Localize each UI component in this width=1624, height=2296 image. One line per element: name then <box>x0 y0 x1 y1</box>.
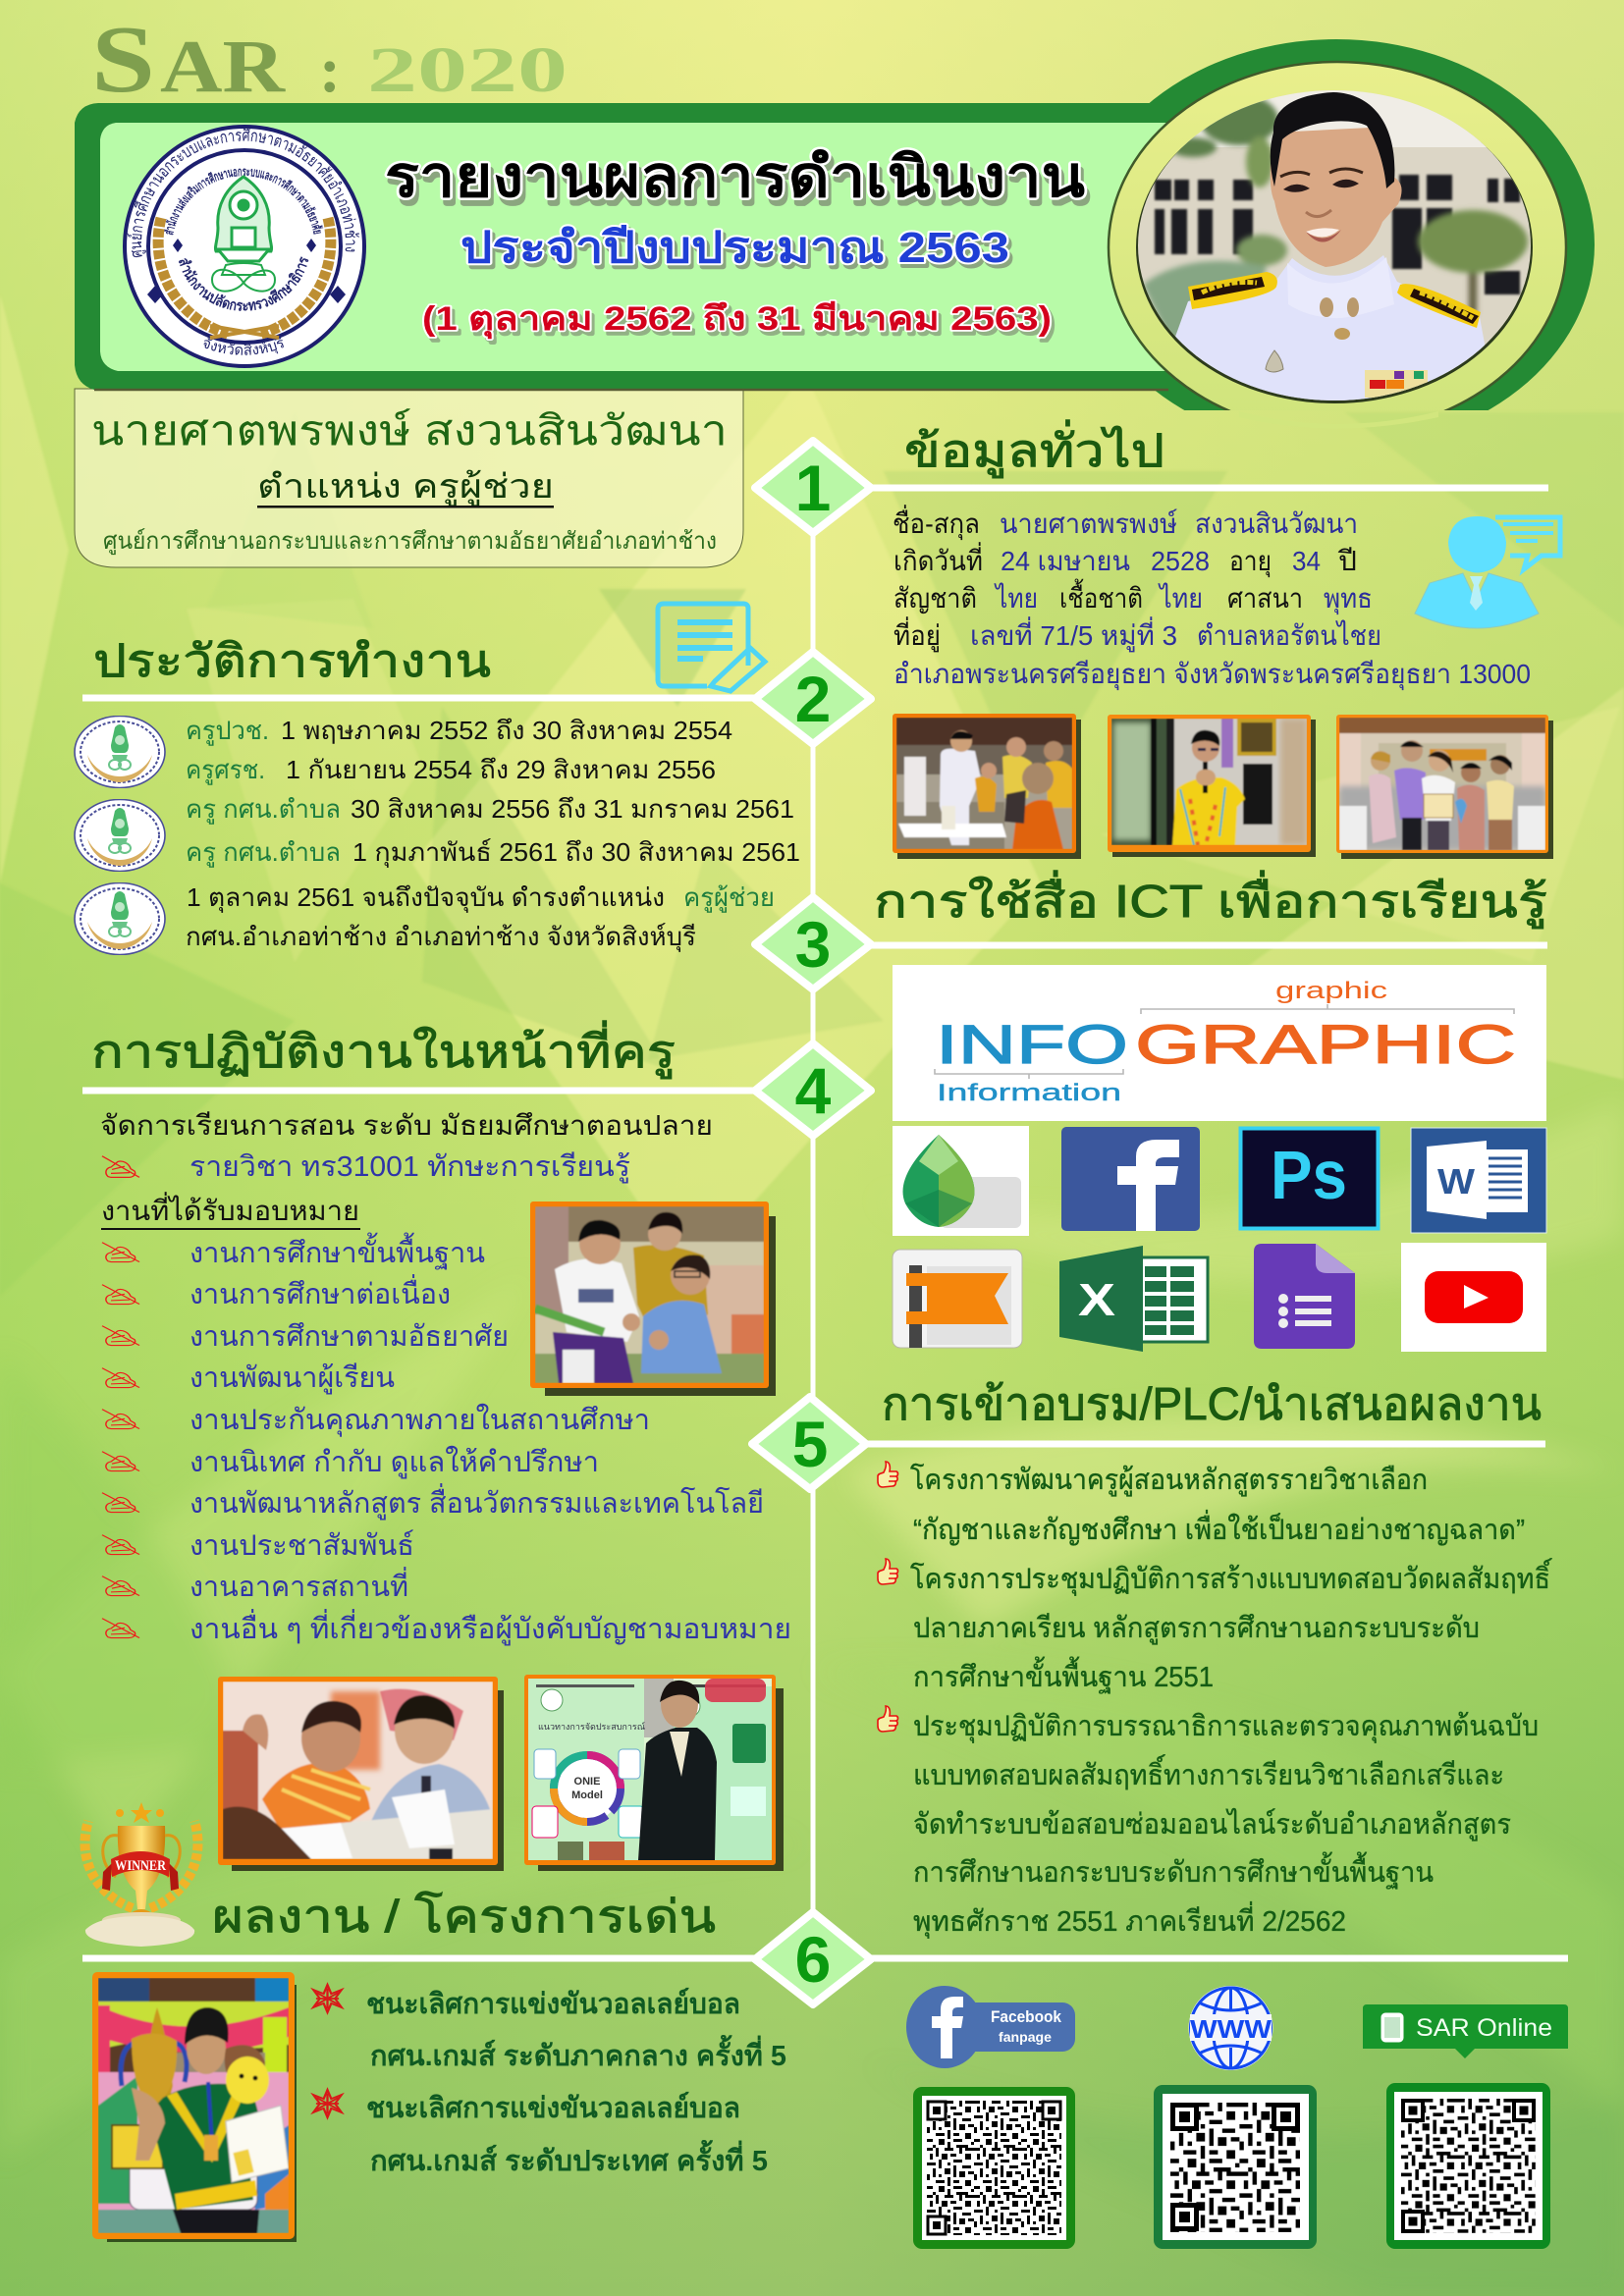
work history entries: 1 พฤษภาคม 2552 ถึง 30 สิงหาคม 2554 <box>281 716 732 745</box>
icon: winner trophy <box>85 1802 197 1947</box>
icon: word <box>1411 1128 1546 1233</box>
achievements text: ชนะเลิศการแข่งขันวอลเลย์บอล <box>366 1987 740 2020</box>
personal details: 34 <box>1292 546 1321 576</box>
photo: speaker with microphone <box>1108 715 1316 857</box>
work history entries: กศน.อำเภอท่าช้าง อำเภอท่าช้าง จังหวัดสิงห์บุรี <box>186 922 696 952</box>
assigned tasks: งานพัฒนาผู้เรียน <box>189 1362 395 1395</box>
logos: history <box>75 717 165 954</box>
photo: ONIE model poster: Model <box>571 1789 603 1801</box>
badge: facebook fanpage <box>906 1986 1075 2068</box>
training list: พุทธศักราช 2551 ภาคเรียนที่ 2/2562 <box>913 1901 1346 1939</box>
personal details: สงวนสินวัฒนา <box>1195 508 1358 539</box>
achievements text: กศน.เกมส์ ระดับประเทศ ครั้งที่ 5 <box>370 2139 768 2177</box>
badge: SAR online: SAR Online <box>1416 2014 1552 2042</box>
work history entries: ครูผู้ช่วย <box>683 882 775 913</box>
infographic wordmark: Information <box>937 1080 1121 1106</box>
photo: meeting <box>218 1677 504 1871</box>
work history entries: 30 สิงหาคม 2556 ถึง 31 มกราคม 2561 <box>351 794 794 824</box>
infographic wordmark: INFO <box>936 1013 1128 1075</box>
badge: SAR online <box>1363 2004 1568 2058</box>
training list: ประชุมปฏิบัติการบรรณาธิการและตรวจคุณภาพต้นฉบับ <box>913 1711 1539 1743</box>
badge: facebook fanpage: Facebook <box>991 2007 1061 2026</box>
training list: การศึกษาขั้นพื้นฐาน 2551 <box>913 1656 1214 1694</box>
work history entries: ครู กศน.ตำบล <box>186 794 341 825</box>
section 1: general info <box>755 419 1560 859</box>
organisation: ศูนย์การศึกษานอกระบบและการศึกษาตามอัธยาศัยอำเภอท่าช้าง <box>103 527 717 556</box>
timeline spine <box>811 481 815 1963</box>
logo <box>123 125 366 368</box>
personal details: เลขที่ 71/5 หมู่ที่ 3 <box>970 616 1177 653</box>
assigned tasks: งานการศึกษาต่อเนื่อง <box>189 1274 451 1310</box>
work history entries <box>186 716 800 952</box>
title: SAR 2020: AR <box>160 26 286 108</box>
QR code: SAR online <box>1386 2083 1550 2249</box>
personal details: เชื้อชาติ <box>1059 578 1143 614</box>
personal details: เกิดวันที่ <box>893 542 983 576</box>
assigned tasks: งานอื่น ๆ ที่เกี่ยวข้องหรือผู้บังคับบัญชามอบหมาย <box>189 1609 791 1646</box>
section 3: ICT <box>755 870 1547 1352</box>
subject: รายวิชา ทร31001 ทักษะการเรียนรู้ <box>189 1151 630 1184</box>
personal details: อำเภอพระนครศรีอยุธยา จังหวัดพระนครศรีอยุธยา 13000 <box>893 659 1531 691</box>
achievements text: กศน.เกมส์ ระดับภาคกลาง ครั้งที่ 5 <box>370 2034 786 2072</box>
heading: fiscal year: ประจำปีงบประมาณ 2563 <box>460 224 1009 272</box>
title: SAR 2020: S <box>91 7 155 112</box>
logo: จังหวัดสิงห์บุรี <box>204 336 284 355</box>
diamond 2: 2 <box>795 663 831 735</box>
training list: แบบทดสอบผลสัมฤทธิ์ทางการเรียนวิชาเลือกเสรีและ <box>913 1754 1504 1791</box>
personal details: ชื่อ-สกุล <box>893 505 980 541</box>
work history entries: 1 กันยายน 2554 ถึง 29 สิงหาคม 2556 <box>286 755 716 784</box>
training list: ปลายภาคเรียน หลักสูตรการศึกษานอกระบบระดับ <box>913 1613 1480 1645</box>
icon: youtube <box>1401 1243 1546 1352</box>
QR code: facebook <box>913 2087 1075 2249</box>
position: ตำแหน่ง ครูผู้ช่วย <box>257 468 554 507</box>
assigned tasks: งานการศึกษาตามอัธยาศัย <box>189 1321 509 1353</box>
diamond 1: 1 <box>795 452 831 524</box>
icon: flag <box>893 1250 1022 1348</box>
personal details: ไทย <box>1158 583 1203 614</box>
heading: general info: ข้อมูลทั่วไป <box>904 419 1164 478</box>
section 4: teacher duties <box>82 1020 871 1871</box>
photo: portrait <box>1129 88 1542 412</box>
section 2: work history <box>75 604 871 954</box>
icon: word: W <box>1437 1161 1475 1201</box>
work history entries: ครูปวช. <box>186 716 269 746</box>
infographic wordmark <box>893 965 1546 1121</box>
title: SAR 2020: 2020 <box>367 34 568 106</box>
heading: work history: ประวัติการทำงาน <box>93 635 491 686</box>
training list: โครงการพัฒนาครูผู้สอนหลักสูตรรายวิชาเลือก <box>910 1463 1428 1497</box>
icon: excel <box>1059 1246 1208 1352</box>
title: SAR 2020 <box>91 7 568 112</box>
icon: winner trophy: WINNER <box>115 1858 166 1874</box>
icon: facebook <box>1061 1127 1200 1231</box>
logo: ศูนย์การศึกษานอกระบบและการศึกษาตามอัธยาศัยอำเภอท่าช้าง <box>128 128 359 257</box>
diamond 4: 4 <box>795 1054 832 1127</box>
photo: ONIE model poster: ONIE <box>574 1776 600 1788</box>
personal details: ปี <box>1337 546 1357 576</box>
assigned tasks: งานการศึกษาขั้นพื้นฐาน <box>189 1232 485 1270</box>
assigned tasks: งานนิเทศ กำกับ ดูแลให้คำปรึกษา <box>189 1445 599 1479</box>
icon: snapseed <box>893 1126 1029 1236</box>
photo: winner with trophy <box>92 1972 297 2242</box>
work history entries: 1 ตุลาคม 2561 จนถึงปัจจุบัน ดำรงตำแหน่ง <box>187 882 665 913</box>
diamond 6: 6 <box>795 1923 831 1996</box>
heading: training: การเข้าอบรม/PLC/นำเสนอผลงาน <box>882 1378 1542 1429</box>
panel: name card <box>75 389 743 567</box>
diamond 5: 5 <box>792 1408 828 1480</box>
personal details <box>893 505 1531 691</box>
section 6: achievements <box>82 1802 1568 2249</box>
work history entries: ครูศรช. <box>186 755 265 785</box>
personal details: ตำบลหอรัตนไชย <box>1197 620 1381 651</box>
assigned tasks: งานอาคารสถานที่ <box>189 1567 408 1603</box>
personal details: ศาสนา <box>1227 583 1303 614</box>
personal details: พุทธ <box>1324 583 1373 615</box>
photo: ONIE model poster: แนวทางการจัดประสบการณ์ <box>538 1721 645 1732</box>
personal details: ที่อยู่ <box>893 616 941 653</box>
assigned tasks: งานประกันคุณภาพภายในสถานศึกษา <box>189 1403 650 1437</box>
personal details: ไทย <box>994 583 1038 614</box>
icon: photoshop: Ps <box>1271 1137 1347 1213</box>
icon: person with speech bubble <box>1415 516 1560 628</box>
heading: ICT: การใช้สื่อ ICT เพื่อการเรียนรู้ <box>874 870 1547 929</box>
QR code: website <box>1154 2085 1317 2249</box>
badge: facebook fanpage: fanpage <box>999 2029 1052 2045</box>
diamond 5 <box>752 1397 866 1489</box>
heading: date range: (1 ตุลาคม 2562 ถึง 31 มีนาคม 2563) <box>422 300 1052 340</box>
teaching level: จัดการเรียนการสอน ระดับ มัธยมศึกษาตอนปลาย <box>100 1110 713 1141</box>
achievements text: ชนะเลิศการแข่งขันวอลเลย์บอล <box>366 2091 740 2124</box>
diamond 3 <box>755 897 871 989</box>
photo: group with certificate <box>1336 715 1553 859</box>
photo: ONIE model poster <box>524 1675 784 1871</box>
personal details: 24 เมษายน <box>1001 546 1130 576</box>
assigned tasks: งานประชาสัมพันธ์ <box>189 1529 414 1562</box>
heading: duties: การปฏิบัติงานในหน้าที่ครู <box>91 1020 676 1079</box>
training list: “กัญชาและกัญชงศึกษา เพื่อใช้เป็นยาอย่างชาญฉลาด” <box>913 1510 1525 1546</box>
badge: www globe: WWW <box>1190 2014 1272 2044</box>
training list <box>878 1462 1552 1939</box>
panel: header banner <box>75 39 1595 428</box>
badge: www globe <box>1188 1986 1272 2070</box>
name: นายศาตพรพงษ์ สงวนสินวัฒนา <box>91 407 728 454</box>
personal details: นายศาตพรพงษ์ <box>1000 508 1178 539</box>
logo: สำนักงานส่งเสริมการศึกษานอกระบบและการศึกษาตามอัธยาศัย <box>164 169 324 236</box>
training list: โครงการประชุมปฏิบัติการสร้างแบบทดสอบวัดผลสัมฤทธิ์ <box>910 1558 1552 1596</box>
section 5: training <box>752 1378 1552 1939</box>
title: SAR 2020: : <box>319 34 341 106</box>
diamond 3: 3 <box>795 908 831 981</box>
infographic wordmark: GRAPHIC <box>1135 1013 1516 1075</box>
heading: achievements: ผลงาน / โครงการเด่น <box>212 1891 716 1942</box>
assigned tasks <box>102 1232 791 1646</box>
assigned tasks: งานพัฒนาหลักสูตร สื่อนวัตกรรมและเทคโนโลยี <box>189 1483 764 1521</box>
personal details: อายุ <box>1229 546 1272 578</box>
infographic wordmark: graphic <box>1275 978 1387 1004</box>
icon: excel: X <box>1078 1274 1115 1325</box>
diamond 6 <box>755 1912 871 2004</box>
diamond 2 <box>755 652 871 744</box>
achievements text <box>313 1985 786 2177</box>
work history entries: ครู กศน.ตำบล <box>186 837 341 868</box>
training list: การศึกษานอกระบบระดับการศึกษาขั้นพื้นฐาน <box>913 1851 1434 1890</box>
assigned heading: งานที่ได้รับมอบหมาย <box>101 1192 359 1226</box>
icon: document with pen <box>658 604 765 691</box>
photo: teacher with monk <box>893 714 1081 859</box>
training list: จัดทำระบบข้อสอบซ่อมออนไลน์ระดับอำเภอหลักสูตร <box>913 1807 1511 1842</box>
work history entries: 1 กุมภาพันธ์ 2561 ถึง 30 สิงหาคม 2561 <box>352 837 800 868</box>
photo: weaving workshop <box>530 1201 776 1396</box>
icon: photoshop <box>1241 1129 1379 1229</box>
logo: สำนักงานปลัดกระทรวงศึกษาธิการ <box>179 256 308 311</box>
diamond 4 <box>755 1043 871 1136</box>
diamond 1 <box>755 441 871 533</box>
personal details: สัญชาติ <box>893 583 977 614</box>
personal details: 2528 <box>1151 546 1210 576</box>
icon: forms <box>1254 1244 1355 1349</box>
heading: report title: รายงานผลการดำเนินงาน <box>385 145 1085 209</box>
